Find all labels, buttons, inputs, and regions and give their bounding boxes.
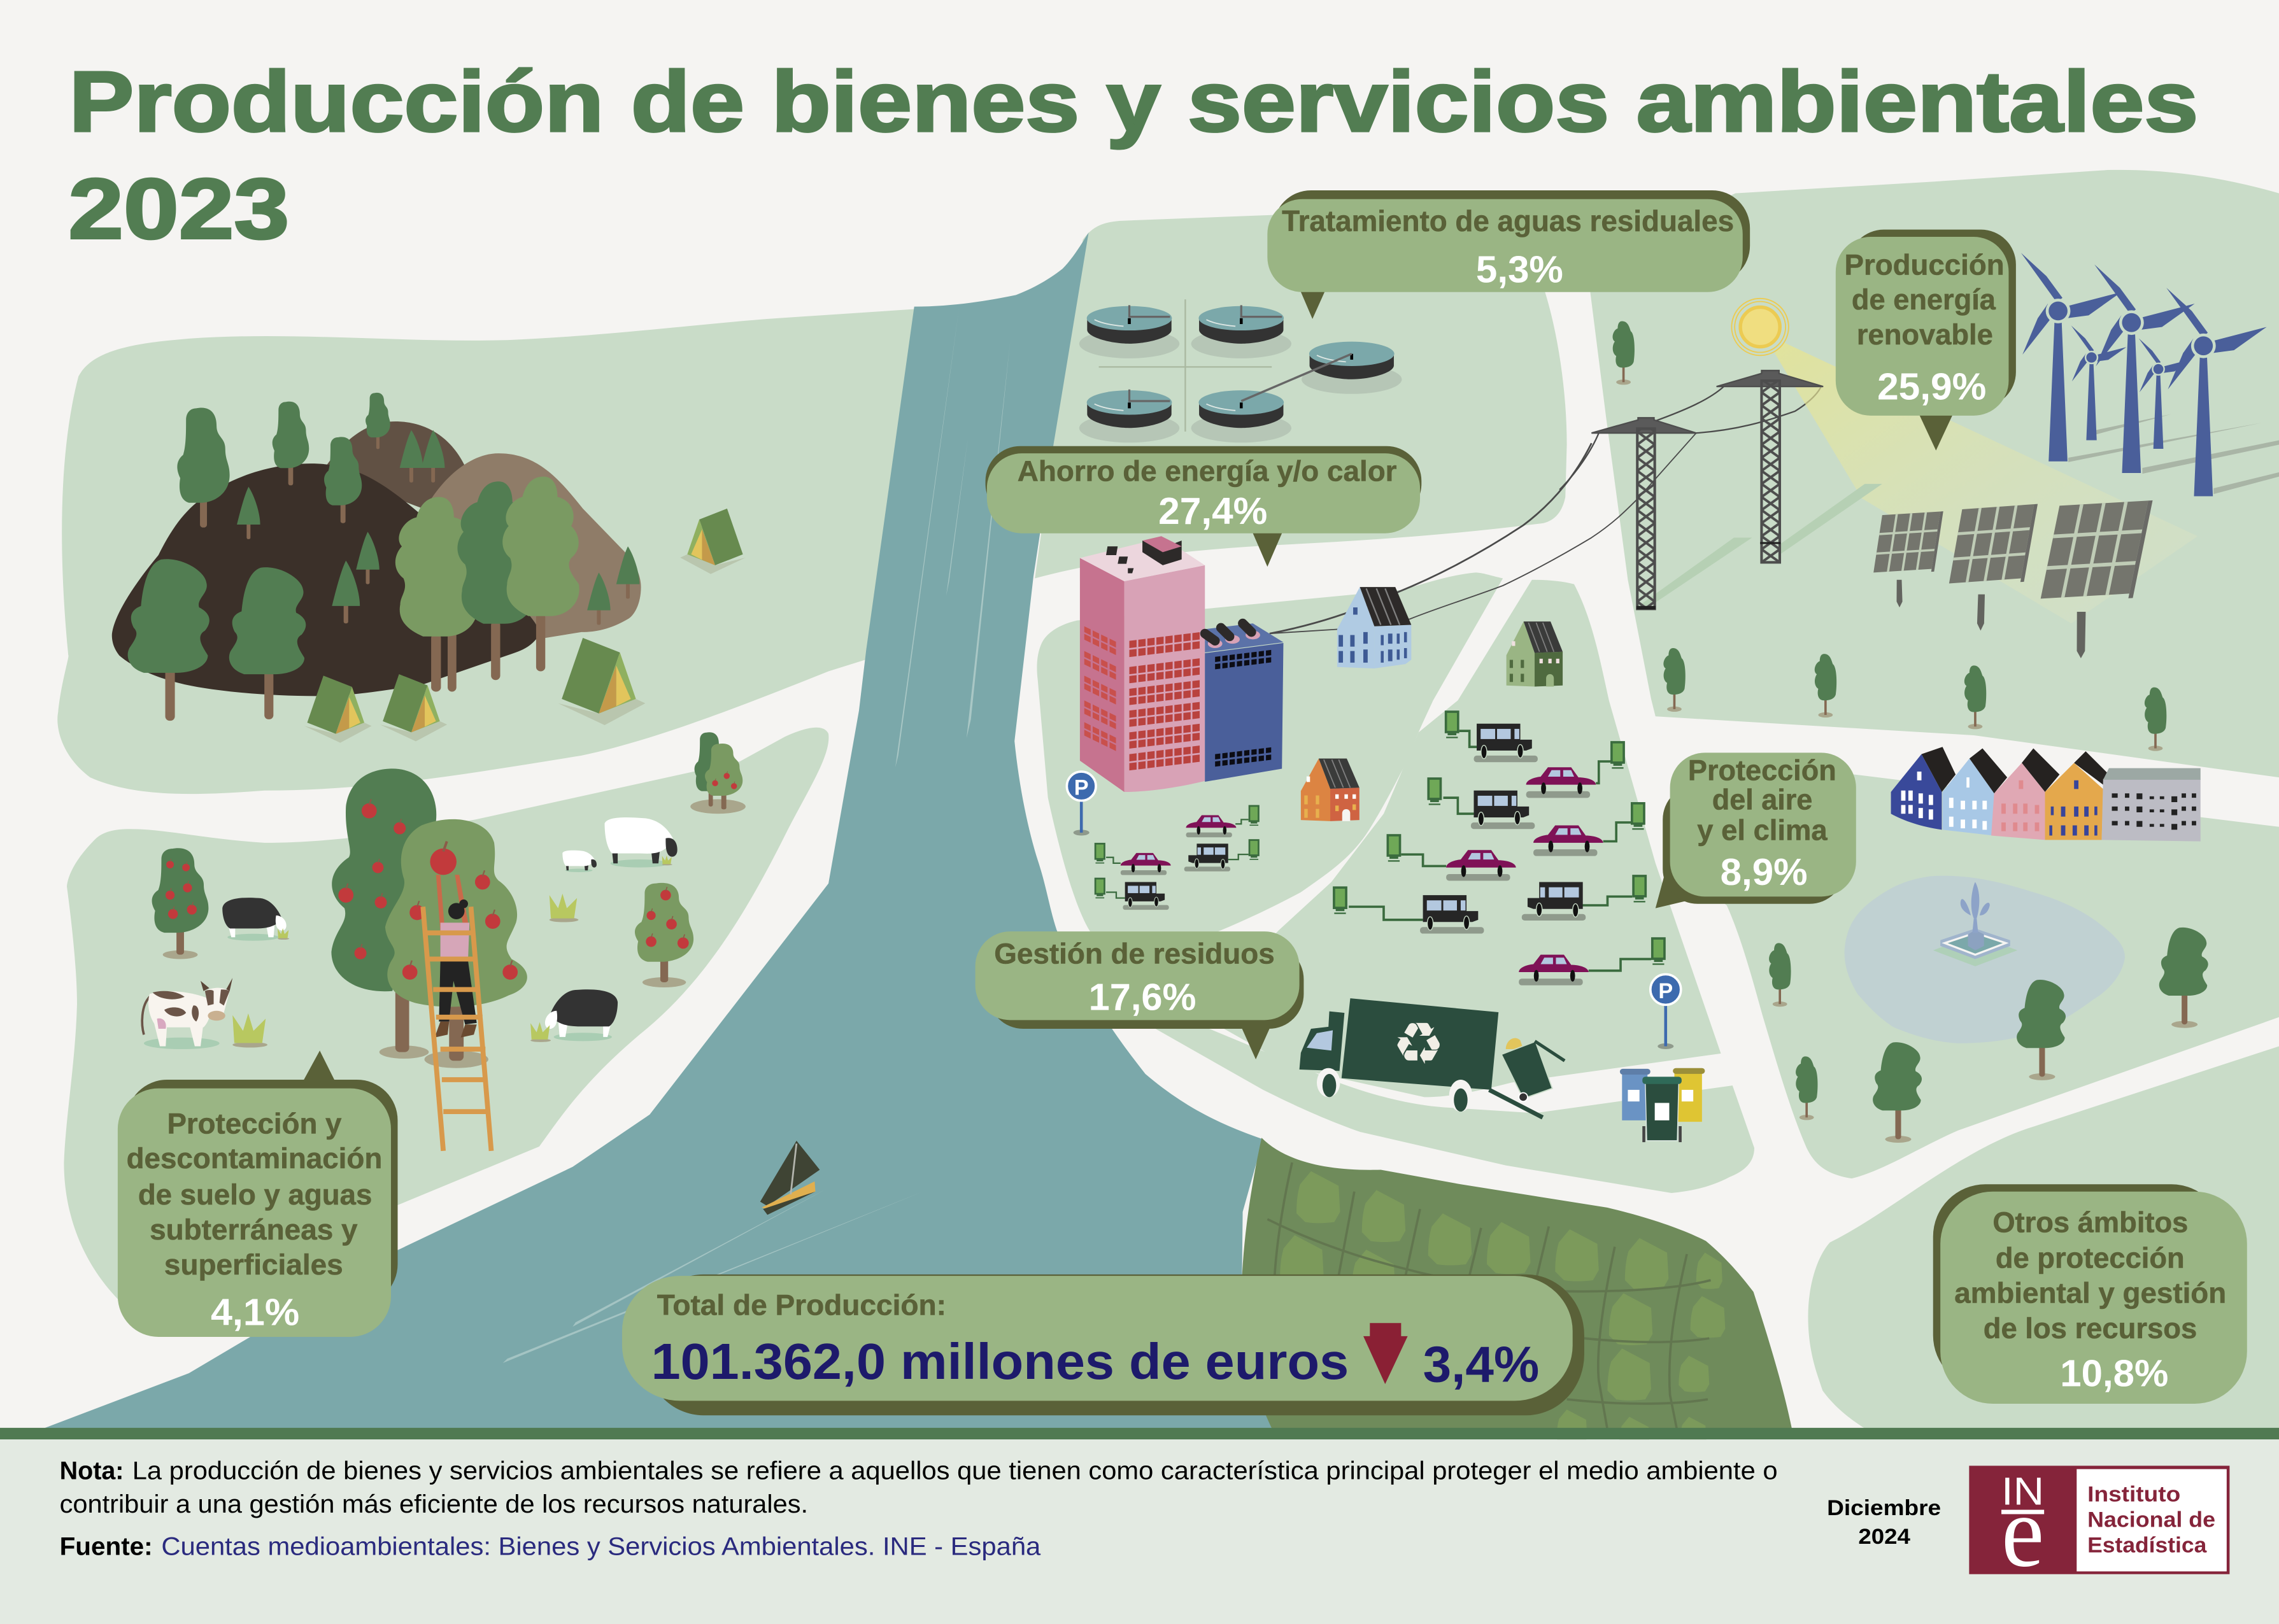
land: upper left forest field (57, 308, 930, 794)
row of houses (1891, 747, 2201, 842)
land: lower right field (1808, 1046, 2279, 1429)
land: park field (1701, 770, 2279, 1178)
orchard: apple trees (152, 732, 746, 1068)
land: central block with vehicles (1203, 580, 1721, 1097)
publication date: 2024 (1858, 1525, 1910, 1549)
callout: total de producción: 101.362,0 millones de euros (651, 1333, 1349, 1390)
animals: black sheep left (222, 898, 287, 941)
callout: tratamiento de aguas residuales (1267, 190, 1750, 319)
blue building with chimneys (1205, 623, 1283, 782)
river (43, 232, 1272, 1429)
callout: producción de energía renovable: de energía (1852, 283, 1996, 316)
callout: otros ámbitos (1933, 1184, 2247, 1404)
title: 2023 (68, 160, 289, 257)
callout: otros ámbitos: 10,8% (2060, 1352, 2168, 1395)
callout: ahorro de energía: Ahorro de energía y/o calor (1018, 455, 1397, 488)
footer strip (0, 1428, 2279, 1439)
recycling bins (1620, 1068, 1705, 1142)
animals: white sheep (562, 817, 678, 872)
callout: tratamiento de aguas residuales: 5,3% (1476, 248, 1563, 291)
solar panels (1873, 500, 2153, 658)
callout: producción de energía renovable: renovable (1857, 318, 1993, 351)
house: light blue (1337, 587, 1411, 668)
parking signs: P (1658, 979, 1673, 1003)
house: green (1507, 621, 1563, 687)
title (68, 53, 2198, 257)
callout: gestión de residuos: Gestión de residuos (994, 937, 1275, 970)
logo: INE: Instituto (2087, 1483, 2180, 1507)
park trees (1873, 928, 2208, 1143)
logo: INE (1969, 1465, 2229, 1588)
power lines (1270, 386, 1821, 633)
land: upper right energy field (1590, 170, 2279, 777)
publication date: Diciembre (1827, 1496, 1941, 1520)
callout: otros ámbitos: de los recursos (1984, 1312, 2197, 1345)
callout: ahorro de energía (986, 446, 1421, 567)
wind turbines (2021, 253, 2279, 496)
callout: producción de energía renovable (1836, 230, 2016, 451)
pond (1845, 876, 2125, 1043)
pink office tower (1080, 536, 1205, 792)
animals: black sheep right (545, 989, 618, 1041)
thin trees (1612, 321, 2166, 1120)
callout: protección del aire y el clima: y el clima (1697, 814, 1828, 846)
electricity pylons (1591, 371, 1882, 611)
land: lower left orchard field (64, 728, 828, 1301)
sun with beams (1731, 299, 2197, 623)
logo: INE: e (2001, 1475, 2044, 1588)
recycling truck (1300, 998, 1565, 1117)
map base: land, river and farmland (43, 170, 2279, 1453)
callout: protección y descontaminación: superficiales (164, 1248, 343, 1281)
forest: hills (112, 421, 641, 696)
logo: INE: IN (2001, 1470, 2044, 1514)
callout: protección del aire y el clima: Protección (1688, 754, 1836, 787)
recycling truck: ♻ (1393, 1010, 1445, 1078)
farmland patches (1267, 1162, 1725, 1453)
river wave lines (503, 307, 1010, 1363)
icon: sailboat (760, 1141, 820, 1215)
callout: otros ámbitos: ambiental y gestión (1954, 1276, 2226, 1309)
electric vehicles with chargers (1095, 712, 1665, 985)
callout: protección del aire y el clima (1656, 752, 1856, 908)
callout: gestión de residuos (976, 931, 1303, 1059)
callout: protección y descontaminación: Protección y (167, 1107, 342, 1140)
callout: ahorro de energía: 27,4% (1158, 490, 1267, 532)
callout: otros ámbitos: Otros ámbitos (1992, 1206, 2188, 1239)
footer source: Fuente: (60, 1532, 153, 1560)
callout: protección y descontaminación (118, 1050, 397, 1337)
land: lower strip with bins (1156, 1029, 1754, 1193)
farmland (1241, 1138, 1792, 1429)
footer note: La producción de bienes y servicios ambientales se refiere a aquellos que tienen como característica principal proteger el medio ambiente o (132, 1457, 1778, 1485)
callout: protección del aire y el clima: del aire (1712, 783, 1812, 816)
parking signs (1067, 772, 1681, 1049)
parking signs: P (1074, 776, 1089, 800)
callout: producción de energía renovable: 25,9% (1877, 365, 1986, 408)
water treatment tanks (1079, 299, 1402, 442)
callout: protección y descontaminación: subterráneas y (150, 1213, 358, 1246)
callout: tratamiento de aguas residuales: Tratamiento de aguas residuales (1282, 204, 1734, 237)
house: orange (1301, 759, 1360, 821)
callout: producción de energía renovable: Producción (1845, 248, 2005, 281)
icon: grass tufts (232, 856, 672, 1048)
footer note (60, 1457, 1778, 1518)
land: central block with buildings (1037, 572, 1503, 931)
callout: total de producción: Total de Producción: (657, 1289, 946, 1322)
icon: fountain (1933, 882, 2017, 966)
logo: INE: Estadística (2087, 1533, 2207, 1557)
footer note: contribuir a una gestión más eficiente de los recursos naturales. (60, 1490, 808, 1518)
callout: protección del aire y el clima: 8,9% (1721, 851, 1808, 893)
callout: protección y descontaminación: 4,1% (211, 1291, 299, 1334)
footer source: Cuentas medioambientales: Bienes y Servicios Ambientales. INE - España (161, 1532, 1040, 1560)
title: Producción de bienes y servicios ambientales (69, 53, 2198, 150)
forest: trees (128, 393, 639, 721)
orchard: person on ladder picking apples (423, 875, 491, 1151)
callout: total de producción (622, 1274, 1584, 1415)
callout: gestión de residuos: 17,6% (1089, 975, 1196, 1018)
callout: protección y descontaminación: de suelo y aguas (138, 1178, 372, 1211)
footer background (0, 1439, 2279, 1624)
icon: camping tents (304, 509, 746, 743)
footer note: Nota: (60, 1457, 124, 1485)
publication date (1827, 1496, 1941, 1549)
callout: otros ámbitos: de protección (1996, 1241, 2185, 1274)
callout: protección y descontaminación: descontaminación (127, 1142, 382, 1175)
icon: down arrow (1363, 1323, 1408, 1384)
animals: cow (142, 978, 232, 1049)
land: water treatment field (1035, 214, 1567, 578)
logo: INE: Nacional de (2087, 1508, 2215, 1532)
callout: total de producción: 3,4% (1423, 1336, 1539, 1393)
